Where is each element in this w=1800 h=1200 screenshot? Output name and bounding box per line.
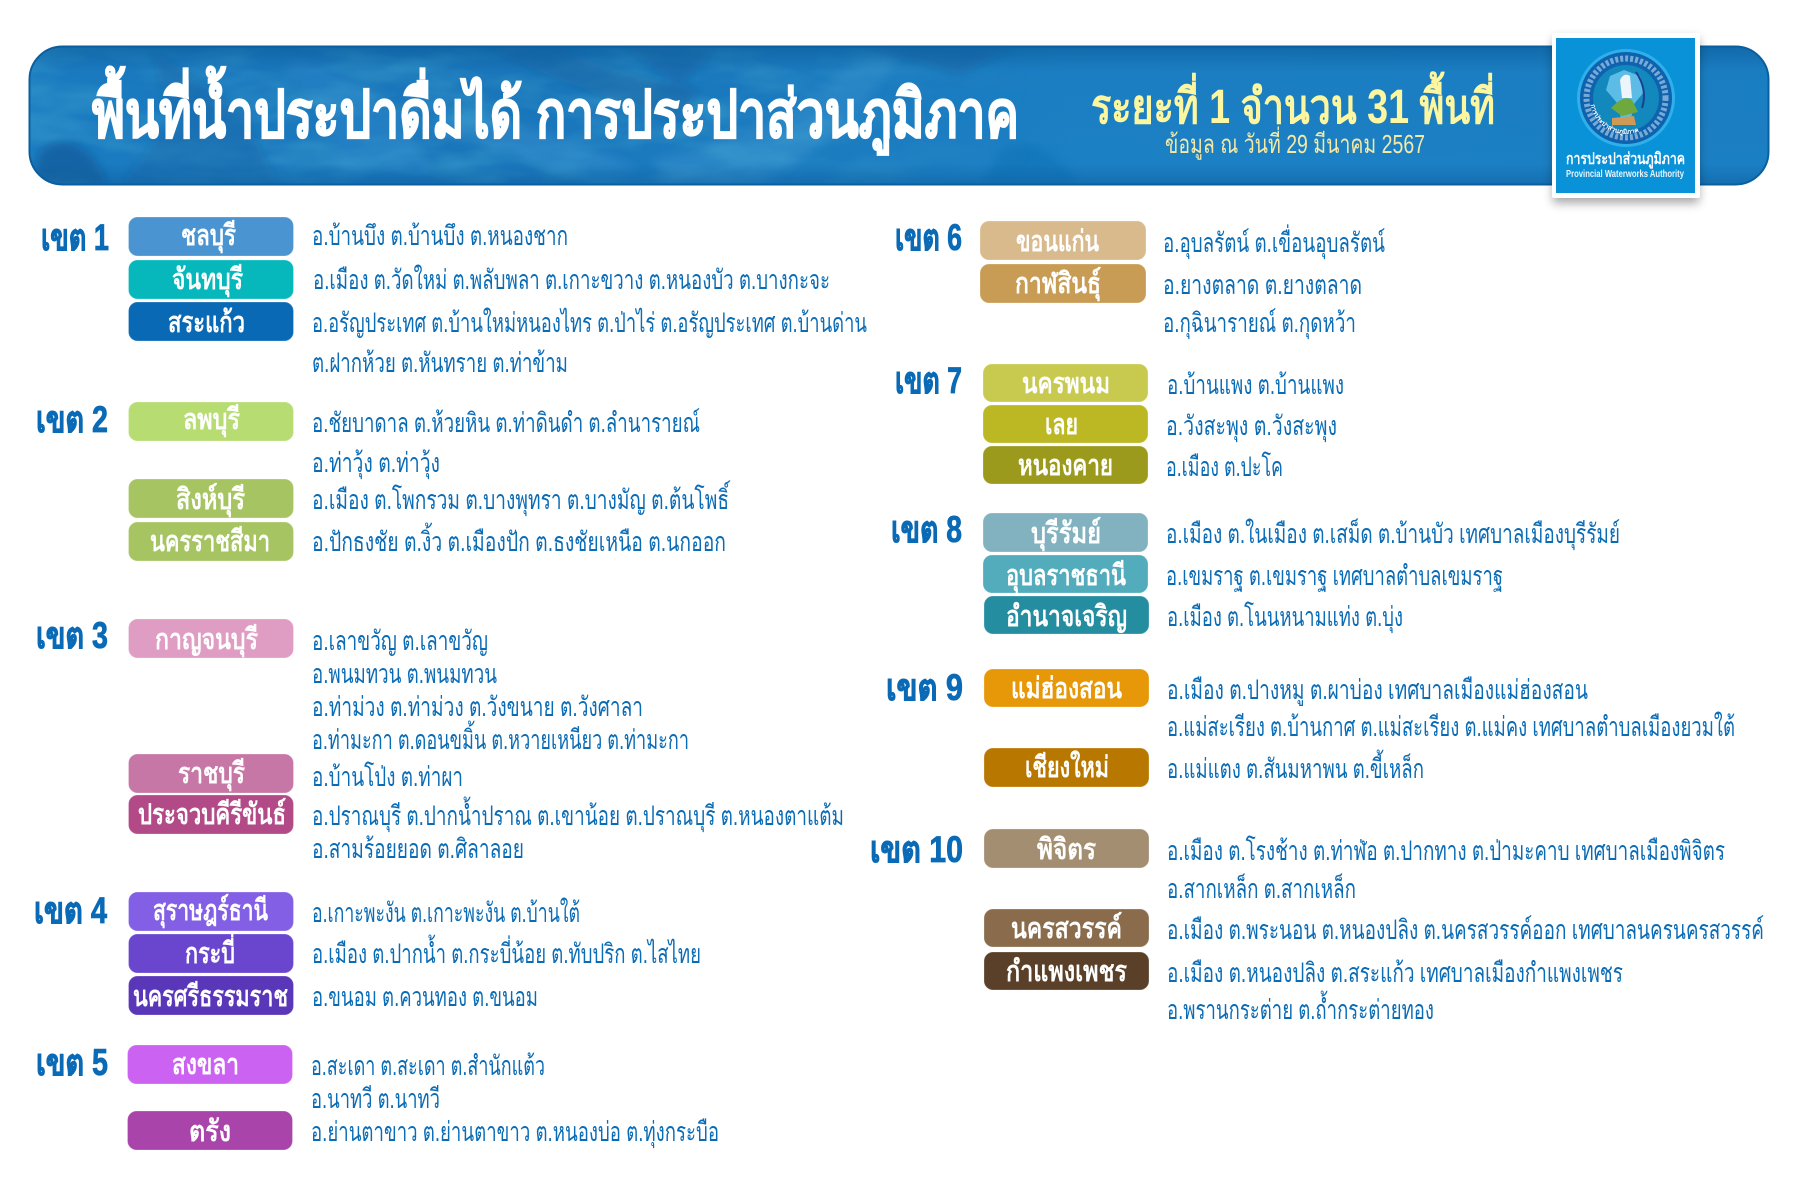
- pill: บุรีรัมย์: บุรีรัมย์: [1031, 516, 1101, 551]
- panel: เขต 9: [886, 667, 1735, 787]
- pill: แม่ฮ่องสอน: แม่ฮ่องสอน: [1011, 673, 1122, 705]
- pill: ลพบุรี: [128, 402, 294, 441]
- title: พื้นที่น้ำประปาดื่มได้ การประปาส่วนภูมิภาค: [92, 65, 1019, 156]
- areas: อ.ท่าม่วง ต.ท่าม่วง ต.วังขนาย ต.วังศาลา: [312, 692, 643, 722]
- areas: อ.ท่าวุ้ง ต.ท่าวุ้ง: [312, 448, 440, 480]
- pill: ขอนแก่น: ขอนแก่น: [1016, 226, 1099, 258]
- pill: พิจิตร: [984, 829, 1149, 868]
- areas: อ.ขนอม ต.ควนทอง ต.ขนอม: [312, 982, 538, 1012]
- areas: อ.เมือง ต.ปางหมู ต.ผาบ่อง เทศบาลเมืองแม่ฮ่องสอน: [1167, 675, 1588, 706]
- heading: เขต 5: [36, 1042, 108, 1083]
- pill: ตรัง: [128, 1111, 292, 1150]
- heading: เขต 8: [891, 509, 962, 550]
- pill: กาญจนบุรี: กาญจนบุรี: [155, 624, 258, 657]
- pill: กระบี่: กระบี่: [185, 932, 235, 970]
- panel: เขต 3: [36, 615, 844, 864]
- pill: สระแก้ว: [128, 302, 294, 341]
- heading: เขต 1: [41, 217, 109, 258]
- panel: เขต 1: [41, 217, 867, 378]
- areas: ต.ฝากห้วย ต.หันทราย ต.ท่าข้าม: [312, 348, 568, 378]
- pill: นครพนม: นครพนม: [1022, 368, 1110, 400]
- areas: อ.นาทวี ต.นาทวี: [311, 1084, 440, 1114]
- heading: เขต 2: [36, 399, 108, 440]
- pill: เชียงใหม่: เชียงใหม่: [1025, 750, 1109, 784]
- pill: กาญจนบุรี: [128, 619, 294, 658]
- areas: อ.เมือง ต.โนนหนามแท่ง ต.บุ่ง: [1167, 602, 1403, 634]
- data date: ข้อมูล ณ วันที่ 29 มีนาคม 2567: [1165, 126, 1425, 160]
- areas: อ.เมือง ต.หนองปลิง ต.สระแก้ว เทศบาลเมืองกำแพงเพชร: [1167, 958, 1623, 988]
- pill: อุบลราชธานี: อุบลราชธานี: [1006, 560, 1126, 593]
- pill: หนองคาย: หนองคาย: [1018, 450, 1113, 482]
- pill: กาฬสินธุ์: กาฬสินธุ์: [1015, 266, 1101, 301]
- pill: ราชบุรี: [128, 754, 294, 793]
- pill: เลย: [983, 405, 1148, 443]
- pill: สระแก้ว: สระแก้ว: [168, 307, 245, 339]
- pill: แม่ฮ่องสอน: [984, 669, 1149, 707]
- areas: อ.วังสะพุง ต.วังสะพุง: [1166, 411, 1337, 443]
- areas: [1167, 836, 1764, 1025]
- pill: อุบลราชธานี: [983, 555, 1148, 593]
- areas: [1167, 675, 1735, 784]
- pill: ชลบุรี: ชลบุรี: [181, 220, 236, 253]
- pill: หนองคาย: [983, 446, 1148, 484]
- heading: เขต 4: [34, 890, 107, 931]
- areas: อ.เมือง ต.วัดใหม่ ต.พลับพลา ต.เกาะขวาง ต.หนองบัว ต.บางกะจะ: [313, 264, 830, 295]
- emblem caption: การประปาส่วนภูมิภาค: [1590, 104, 1639, 136]
- pill: สงขลา: สงขลา: [172, 1049, 239, 1081]
- areas: [312, 897, 701, 1012]
- banner: [29, 46, 1769, 185]
- heading: เขต 10: [870, 829, 963, 870]
- pill: อำนาจเจริญ: อำนาจเจริญ: [1006, 601, 1127, 634]
- heading: เขต 7: [895, 360, 962, 401]
- pill: ชลบุรี: [128, 217, 294, 256]
- areas: อ.ยางตลาด ต.ยางตลาด: [1163, 270, 1362, 300]
- areas: อ.สามร้อยยอด ต.ศิลาลอย: [312, 834, 524, 864]
- areas: [1166, 516, 1620, 634]
- logo english name: Provincial Waterworks Authority: [1566, 169, 1684, 180]
- areas: อ.เมือง ต.ปากน้ำ ต.กระบี่น้อย ต.ทับปริก ต.ไสไทย: [312, 934, 701, 969]
- panel: เขต 4: [34, 890, 701, 1015]
- pill: ราชบุรี: ราชบุรี: [178, 758, 245, 791]
- areas: อ.เมือง ต.ปะโค: [1166, 452, 1283, 482]
- areas: อ.สากเหล็ก ต.สากเหล็ก: [1167, 871, 1356, 904]
- areas: อ.บ้านแพง ต.บ้านแพง: [1167, 370, 1344, 400]
- pill: สุราษฎร์ธานี: สุราษฎร์ธานี: [153, 893, 268, 928]
- heading: เขต 3: [36, 615, 108, 656]
- areas: [1166, 370, 1344, 482]
- areas: อ.ชัยบาดาล ต.ห้วยหิน ต.ท่าดินดำ ต.ลำนารายณ์: [312, 407, 700, 438]
- pill: สิงห์บุรี: สิงห์บุรี: [176, 482, 245, 517]
- pill: เลย: เลย: [1045, 409, 1078, 441]
- heading: เขต 6: [895, 217, 962, 258]
- logo thai name: การประปาส่วนภูมิภาค: [1566, 150, 1685, 170]
- areas: อ.ปราณบุรี ต.ปากน้ำปราณ ต.เขาน้อย ต.ปราณบุรี ต.หนองตาแต้ม: [312, 796, 844, 833]
- pill: จันทบุรี: [128, 260, 294, 299]
- pill: สุราษฎร์ธานี: [128, 892, 294, 931]
- subtitle: phase: ระยะที่ 1 จำนวน 31 พื้นที่: [1091, 71, 1495, 134]
- pill: สงขลา: [128, 1045, 292, 1084]
- pill: กระบี่: [128, 932, 294, 973]
- pill: จันทบุรี: จันทบุรี: [172, 264, 243, 297]
- pill: เชียงใหม่: [984, 748, 1149, 787]
- areas: อ.ย่านตาขาว ต.ย่านตาขาว ต.หนองบ่อ ต.ทุ่งกระบือ: [311, 1117, 719, 1149]
- areas: อ.บ้านบึง ต.บ้านบึง ต.หนองชาก: [312, 221, 568, 251]
- pill: ขอนแก่น: [980, 221, 1146, 260]
- pill: ประจวบคีรีขันธ์: [128, 795, 294, 834]
- areas: อ.เกาะพะงัน ต.เกาะพะงัน ต.บ้านใต้: [312, 897, 580, 928]
- areas: อ.เมือง ต.โพกรวม ต.บางพุทรา ต.บางมัญ ต.ต้นโพธิ์: [312, 480, 731, 517]
- areas: อ.เมือง ต.ในเมือง ต.เสม็ด ต.บ้านบัว เทศบาลเมืองบุรีรัมย์: [1166, 516, 1620, 551]
- pill: ประจวบคีรีขันธ์: ประจวบคีรีขันธ์: [138, 797, 286, 831]
- areas: อ.บ้านโป่ง ต.ท่าผา: [312, 762, 463, 792]
- areas: อ.กุฉินารายณ์ ต.กุดหว้า: [1163, 307, 1356, 340]
- panel: เขต 7: [895, 360, 1344, 484]
- panel: เขต 5: [36, 1042, 719, 1150]
- pill: ตรัง: ตรัง: [189, 1116, 231, 1148]
- logo card: [1547, 32, 1705, 209]
- areas: [312, 221, 867, 378]
- panel: เขต 10: [870, 829, 1764, 1025]
- pill: กำแพงเพชร: กำแพงเพชร: [1006, 956, 1127, 988]
- pill: นครพนม: [983, 364, 1148, 402]
- panel: เขต 2: [36, 399, 731, 561]
- areas: [1163, 224, 1385, 340]
- areas: อ.อรัญประเทศ ต.บ้านใหม่หนองไทร ต.ป่าไร่ ต.อรัญประเทศ ต.บ้านด่าน: [312, 307, 867, 338]
- areas: อ.พนมทวน ต.พนมทวน: [312, 659, 497, 689]
- areas: อ.สะเดา ต.สะเดา ต.สำนักแต้ว: [311, 1051, 545, 1081]
- pill: นครราชสีมา: นครราชสีมา: [150, 526, 270, 558]
- icon: emblem: [1577, 49, 1675, 147]
- pill: อำนาจเจริญ: [984, 596, 1149, 634]
- areas: อ.ท่ามะกา ต.ดอนขมิ้น ต.หวายเหนียว ต.ท่ามะกา: [312, 720, 689, 755]
- pill: พิจิตร: พิจิตร: [1037, 834, 1096, 866]
- pill: นครราชสีมา: [128, 522, 294, 561]
- pill: นครสวรรค์: นครสวรรค์: [1011, 911, 1122, 945]
- pill: นครศรีธรรมราช: นครศรีธรรมราช: [133, 981, 288, 1013]
- pill: บุรีรัมย์: [983, 513, 1148, 552]
- pill: ลพบุรี: ลพบุรี: [183, 404, 240, 437]
- pill: นครศรีธรรมราช: [128, 976, 294, 1015]
- areas: อ.เขมราฐ ต.เขมราฐ เทศบาลตำบลเขมราฐ: [1166, 561, 1503, 592]
- pill: นครสวรรค์: [984, 909, 1149, 947]
- areas: อ.อุบลรัตน์ ต.เขื่อนอุบลรัตน์: [1163, 224, 1385, 260]
- areas: [311, 1051, 719, 1149]
- pill: กาฬสินธุ์: [980, 264, 1146, 303]
- panel: เขต 6: [895, 217, 1385, 340]
- panel: เขต 8: [891, 509, 1620, 634]
- areas: อ.พรานกระต่าย ต.ถ้ำกระต่ายทอง: [1167, 990, 1434, 1025]
- areas: อ.ปักธงชัย ต.งิ้ว ต.เมืองปัก ต.ธงชัยเหนือ ต.นกออก: [312, 522, 726, 557]
- areas: [312, 626, 844, 864]
- heading: เขต 9: [886, 667, 963, 708]
- areas: อ.เลาขวัญ ต.เลาขวัญ: [312, 626, 488, 656]
- areas: อ.แม่แตง ต.สันมหาพน ต.ขี้เหล็ก: [1167, 749, 1424, 784]
- areas: [312, 407, 731, 557]
- pill: สิงห์บุรี: [128, 479, 294, 518]
